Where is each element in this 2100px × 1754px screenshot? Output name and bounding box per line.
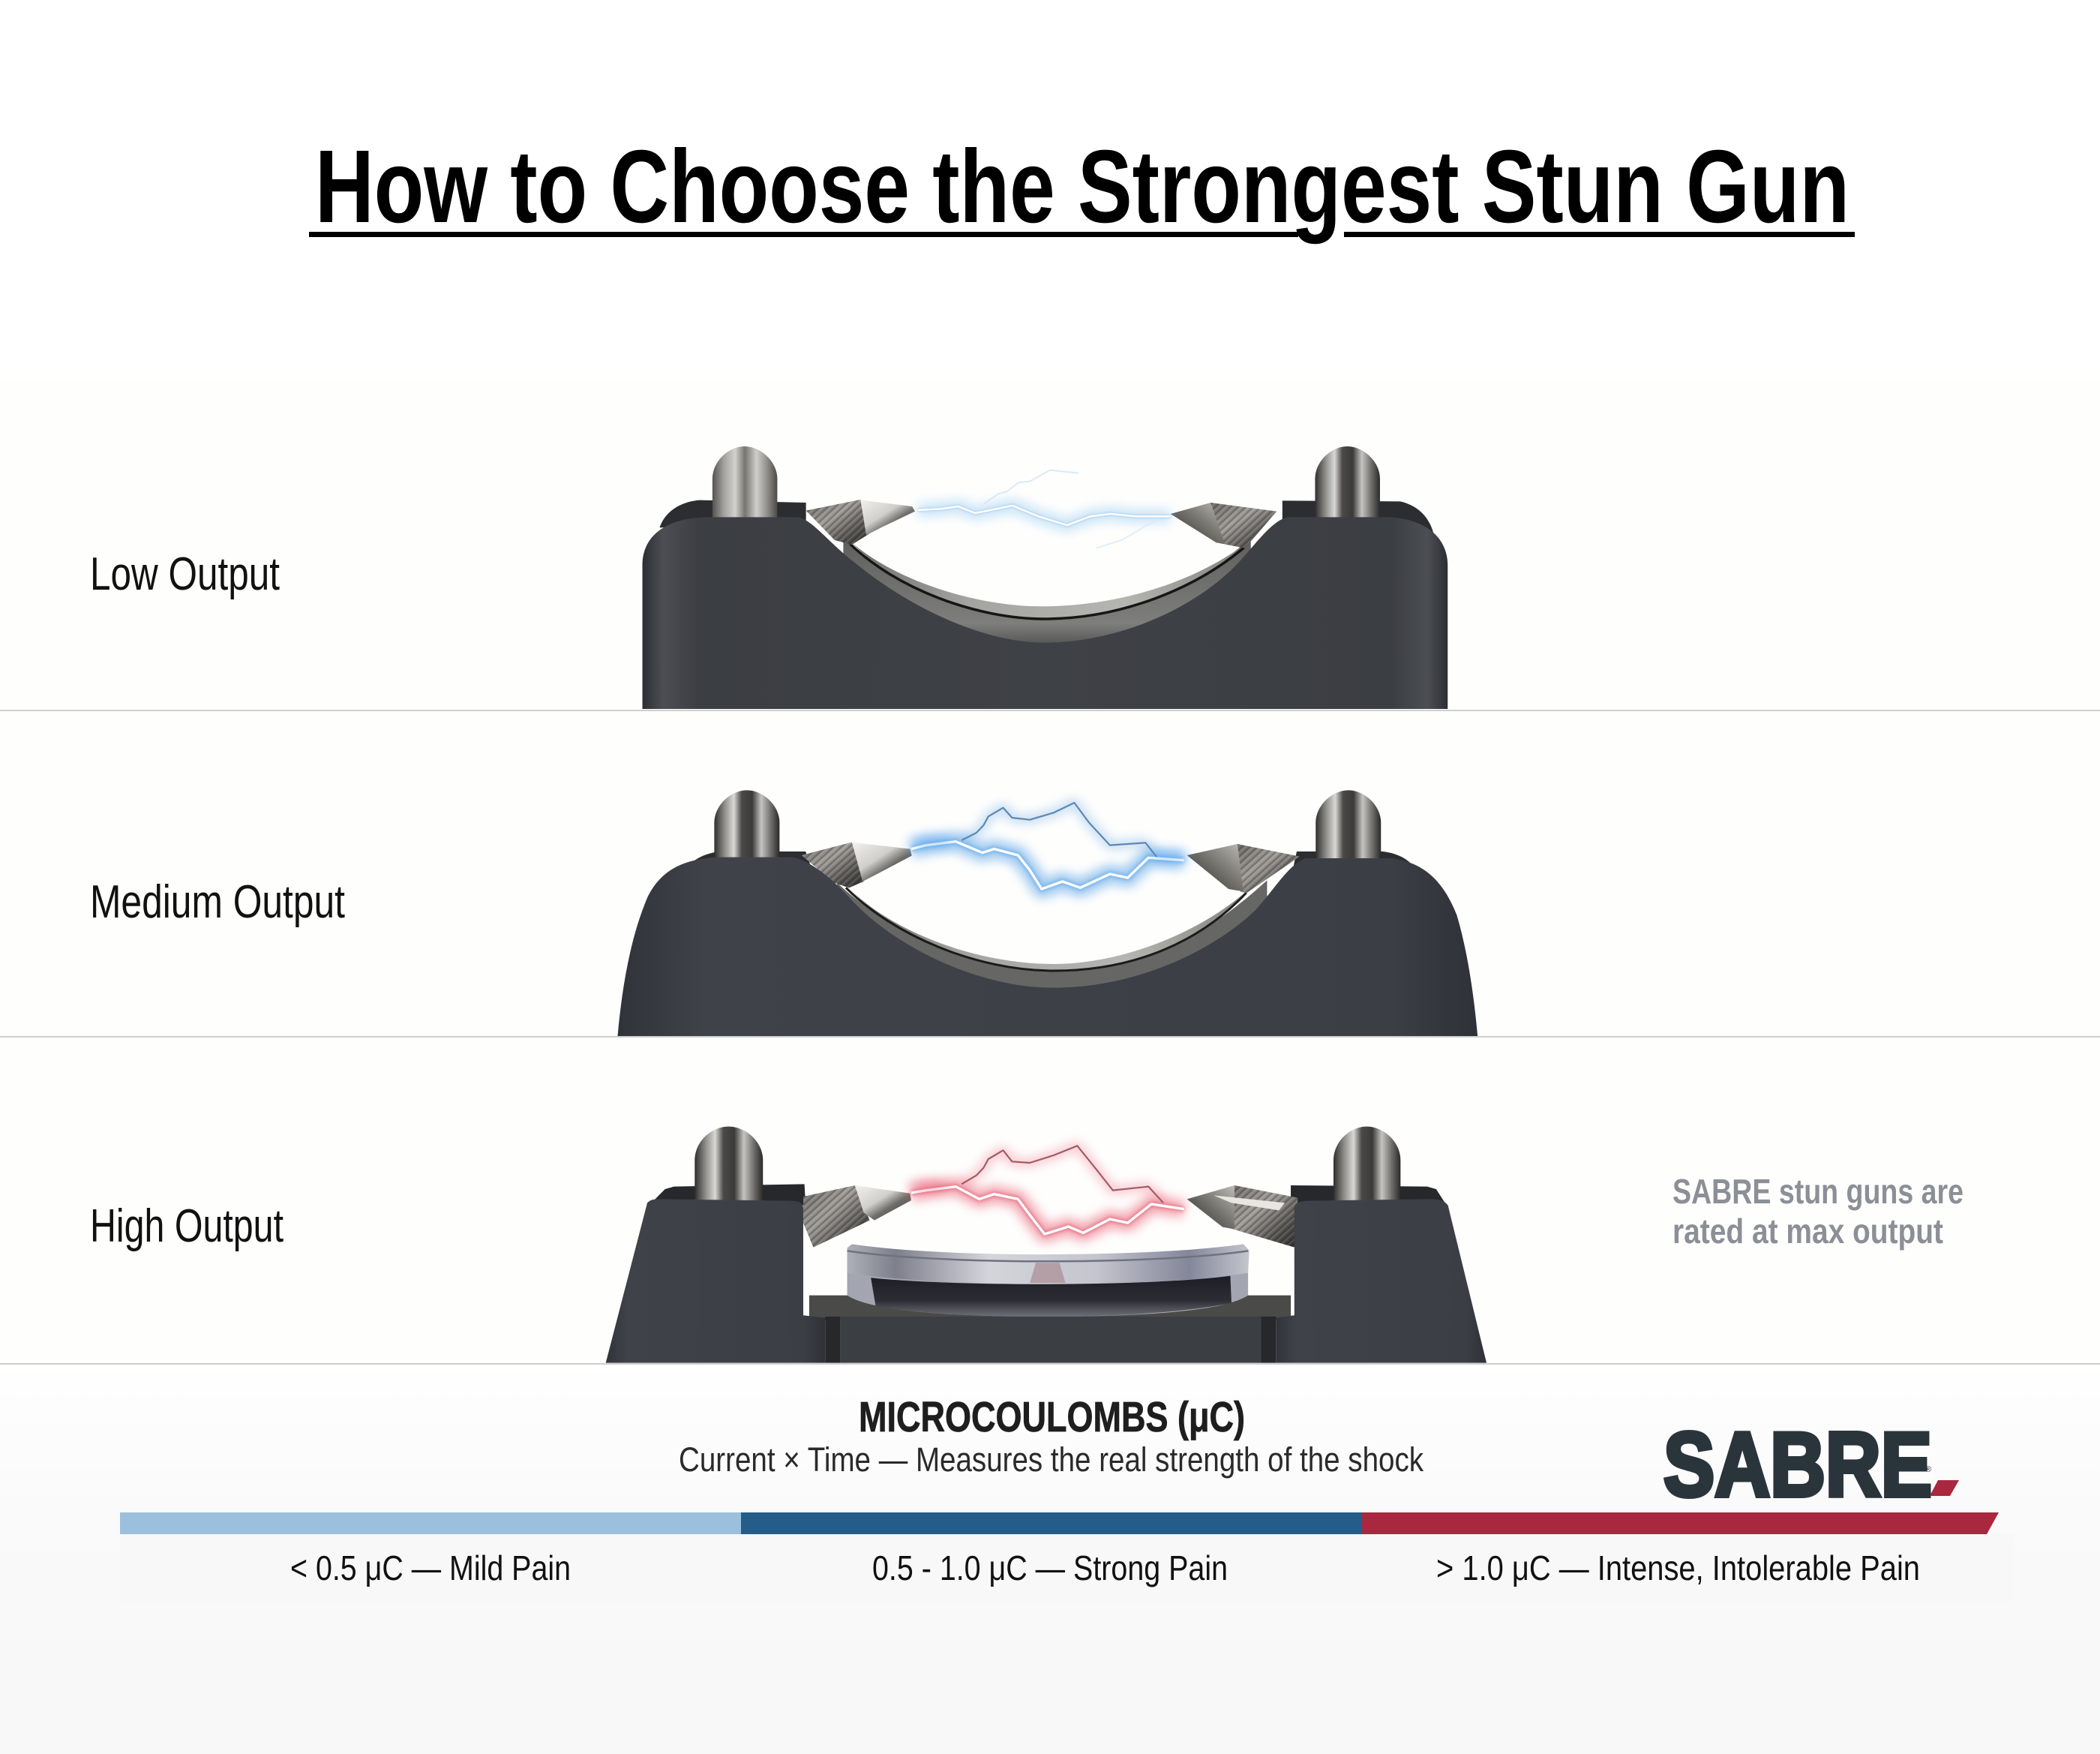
glass dial [848, 1244, 1250, 1317]
stun gun: low output [643, 446, 1448, 709]
divider [0, 710, 2100, 711]
logo: SABRE: ® [1925, 1465, 1931, 1474]
label: low output: Low Output [90, 548, 280, 600]
note: SABRE rating: rated at max output [1672, 1212, 1943, 1251]
label: medium output: Medium Output [90, 876, 345, 928]
logo: SABRE: SABRE [1664, 1413, 1932, 1515]
panel: microcoulombs scale [0, 1365, 2100, 1754]
lightning: medium output arc [910, 803, 1189, 889]
note: SABRE rating [1672, 1172, 1964, 1251]
scale label: mild: < 0.5 μC — Mild Pain [290, 1548, 571, 1587]
scale label: strong: 0.5 - 1.0 μC — Strong Pain [872, 1548, 1228, 1587]
panel: medium output [0, 711, 2100, 1036]
lightning: low output arc [918, 470, 1171, 548]
stun gun: medium output [617, 790, 1478, 1036]
panel: low output [0, 380, 2100, 710]
lightning: high output arc [910, 1146, 1184, 1234]
scale label: intense: > 1.0 μC — Intense, Intolerable Pain [1436, 1548, 1920, 1587]
panel: high output [0, 1038, 2100, 1363]
divider [0, 1036, 2100, 1038]
label: high output: High Output [90, 1200, 284, 1252]
scale heading: MICROCOULOMBS (μC) [859, 1393, 1245, 1441]
divider [0, 1363, 2100, 1365]
scale bar [120, 1512, 1999, 1534]
scale subheading: Current × Time — Measures the real strength of the shock [679, 1440, 1424, 1479]
stun gun: high output [606, 1127, 1486, 1363]
note: SABRE rating: SABRE stun guns are [1672, 1172, 1964, 1211]
